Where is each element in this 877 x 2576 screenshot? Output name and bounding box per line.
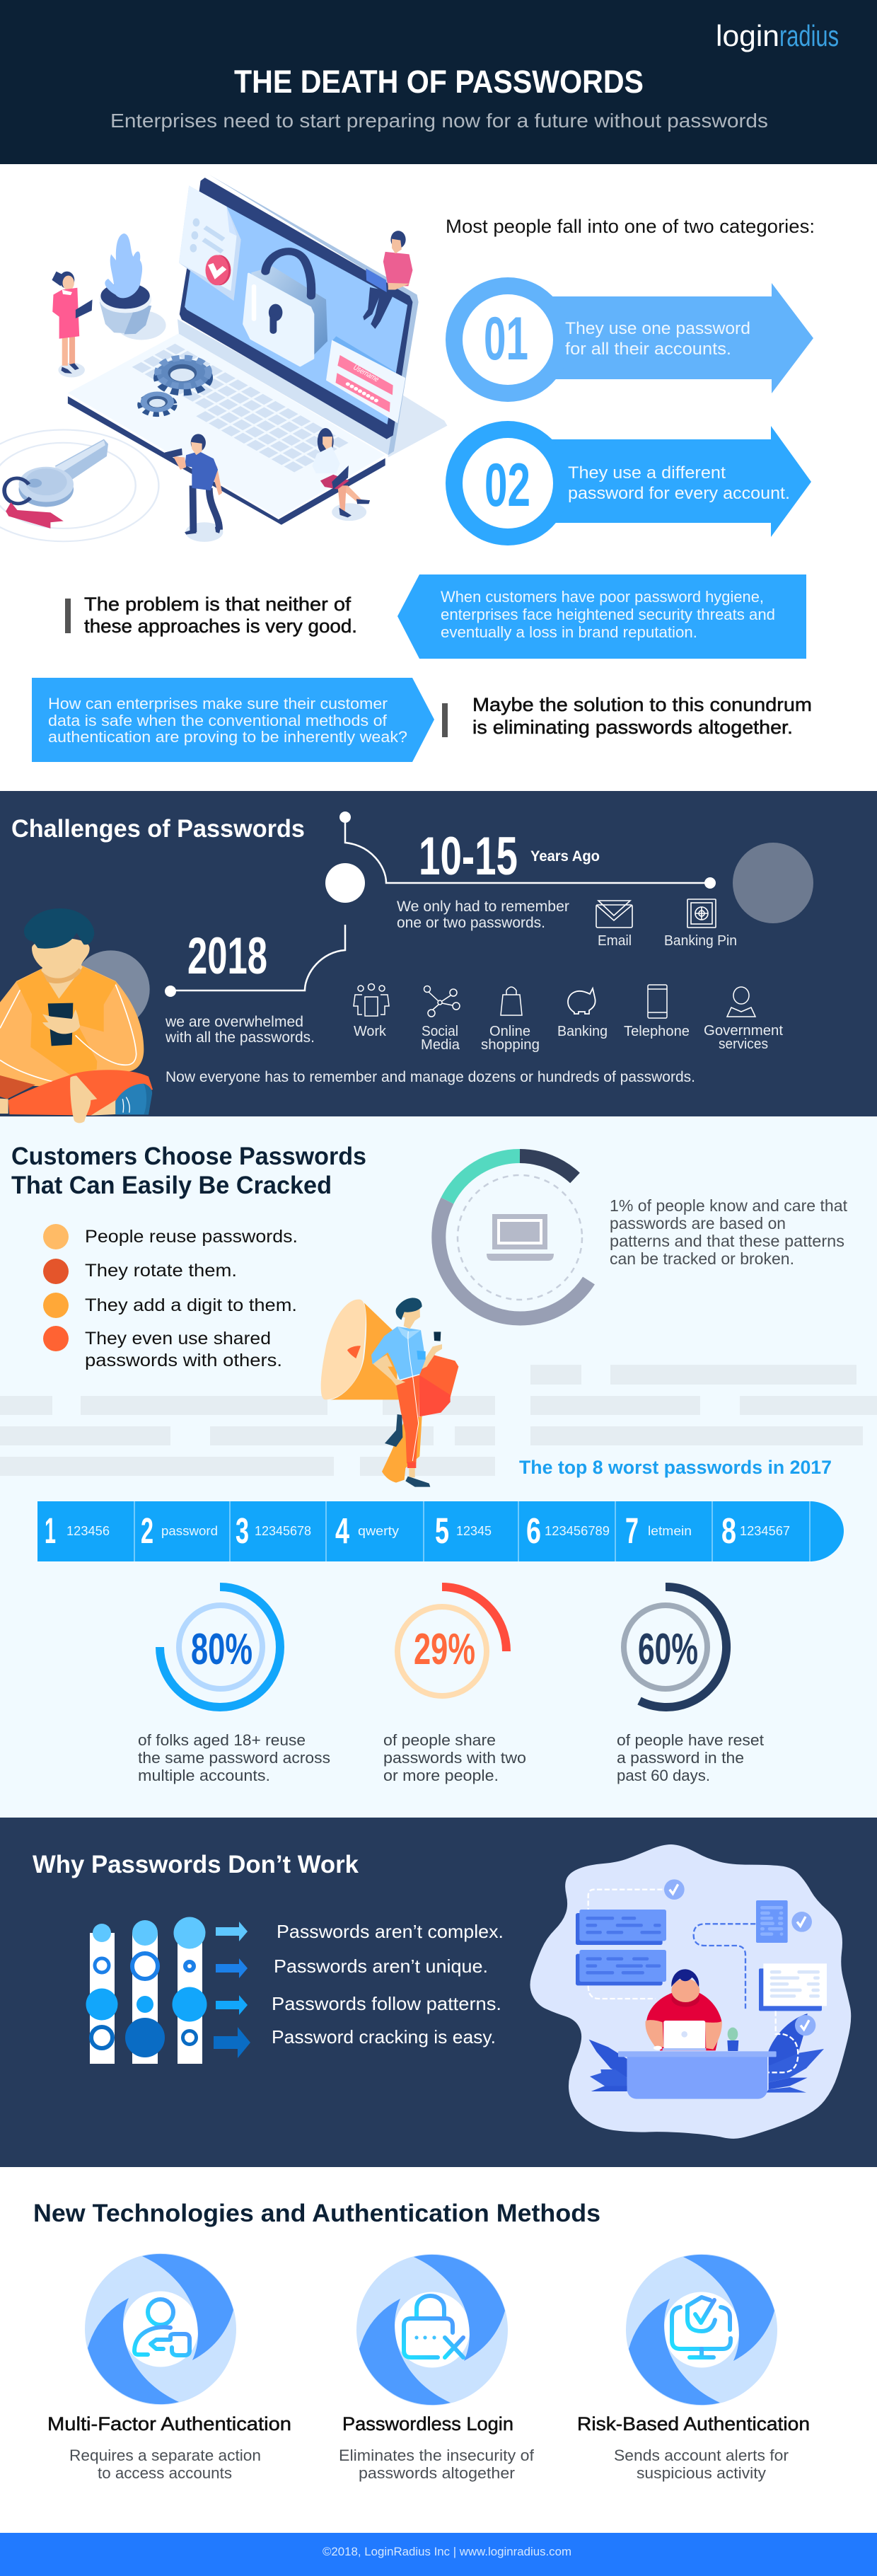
list of reasons: Password cracking is easy. [272, 2026, 496, 2047]
stat text: 29%: or more people. [383, 1767, 499, 1784]
text: everyone: Now everyone has to remember and manage dozens or hundreds of passwords. [165, 1069, 695, 1085]
small plant [727, 2028, 738, 2051]
illustration: person with megaphone [321, 1298, 458, 1487]
description: Requires a separate action [69, 2447, 261, 2464]
keyboard [125, 346, 346, 471]
footer: ©2018, LoginRadius Inc | www.loginradius.com [323, 2545, 571, 2558]
badge with monitor shield icon [626, 2254, 777, 2405]
footer [0, 2533, 877, 2576]
stat ring: 80%: 80% [191, 1625, 252, 1674]
password ranking bar [37, 1501, 844, 1561]
statement: the solution [442, 694, 812, 738]
arrow 1 [216, 1922, 248, 1941]
category 01 arrow [446, 277, 813, 402]
label: online shopping: Online [489, 1024, 530, 1039]
callout: password hygiene [397, 574, 806, 659]
callout: password hygiene: eventually a loss in brand reputation. [441, 623, 697, 641]
label: 2018: 2018 [187, 928, 267, 985]
subtitle: Enterprises need to start preparing now for a future without passwords [110, 110, 768, 132]
panel: person illustration over challenges section [0, 908, 153, 1123]
password names: 12345678 [255, 1524, 311, 1538]
label: Multi-Factor Authentication [47, 2413, 291, 2435]
bullet list: They rotate them. [85, 1261, 237, 1281]
padlock [244, 251, 327, 366]
leaves [589, 2014, 824, 2093]
heading: new technologies: New Technologies and Authentication Methods [33, 2200, 600, 2227]
list of reasons: Passwords aren’t complex. [277, 1921, 504, 1942]
arrow 2 [216, 1958, 248, 1978]
badge with user key icon [85, 2253, 236, 2405]
label: online shopping [481, 1024, 540, 1053]
rank numbers: 1 [45, 1511, 56, 1551]
columns of dots [86, 1917, 207, 2064]
dashed connectors [588, 1890, 755, 2009]
bullet list: They add a digit to them. [85, 1295, 297, 1315]
rank numbers: 6 [526, 1511, 541, 1551]
text: category 02: They use a different [568, 463, 726, 483]
label: email: Email [598, 933, 632, 949]
text: now: we are overwhelmed [165, 1014, 303, 1030]
stat text: 60%: a password in the [617, 1749, 744, 1767]
laptop shadow [387, 385, 447, 458]
icon: piggy bank [568, 988, 596, 1014]
document tablet [756, 1900, 788, 1943]
heading: That Can Easily Be Cracked [11, 1172, 332, 1199]
person: man with flashlight [165, 434, 223, 542]
description: to access accounts [98, 2464, 232, 2482]
list of reasons: Passwords follow patterns. [272, 1993, 501, 2014]
label: Passwordless Login [342, 2413, 513, 2435]
arrow 4 [214, 2027, 250, 2058]
label: banking: Banking [557, 1024, 608, 1039]
right dashed connector [769, 2011, 798, 2072]
stat ring: 60% [624, 1587, 726, 1707]
icon: telephone [648, 985, 667, 1018]
panel: challenges of passwords [0, 791, 877, 1116]
statement: the solution: is eliminating passwords altogether. [472, 717, 793, 738]
text: 1% of people: passwords are based on [610, 1214, 786, 1232]
laptop base [68, 319, 393, 525]
data cards [576, 1910, 666, 1985]
illustration: developer at desk [530, 1845, 850, 2138]
person at laptop [646, 1969, 722, 2050]
icon: online shopping [501, 987, 522, 1015]
stat text: 80%: the same password across [138, 1749, 330, 1767]
description: passwords altogether [359, 2464, 515, 2482]
panel: weak passwords [0, 1116, 877, 1818]
text: category 01 [565, 319, 750, 359]
method: multi-factor authentication [47, 2253, 291, 2482]
password names: 123456 [66, 1524, 110, 1538]
key with rings [0, 429, 158, 541]
login card: Username [352, 364, 381, 383]
label: top 8 worst passwords: The top 8 worst passwords in 2017 [519, 1457, 832, 1478]
callout: customer data: authentication are proving to be inherently weak? [48, 728, 407, 746]
icon: government services [727, 987, 755, 1017]
check badges [664, 1879, 815, 2035]
stat ring: 29% [397, 1587, 506, 1696]
label: work: Work [354, 1024, 387, 1039]
statement: the problem: The problem is that neither of [84, 594, 352, 615]
stat text: 29%: passwords with two [383, 1749, 526, 1767]
rank numbers: 8 [721, 1511, 736, 1551]
text: category 01: for all their accounts. [565, 340, 731, 359]
logo: loginradius [716, 19, 839, 52]
stat text: 60%: past 60 days. [617, 1767, 710, 1784]
callout: customer data [32, 678, 434, 762]
label: government services [704, 1023, 783, 1052]
laptop screen [180, 175, 419, 455]
list of reasons [272, 1921, 504, 2047]
statement: the problem: these approaches is very good. [84, 616, 357, 637]
callout: customer data: data is safe when the conventional methods of [48, 712, 388, 729]
stat text: 29% [383, 1731, 526, 1784]
icon: banking pin safe [687, 899, 716, 928]
text: category 01: They use one password [565, 319, 750, 338]
heading: Challenges of Passwords [11, 815, 305, 843]
password names: qwerty [358, 1524, 399, 1538]
badge with lock icon [356, 2254, 508, 2405]
category 02 arrow [446, 421, 811, 545]
description: Eliminates the insecurity of [339, 2447, 535, 2464]
background bars [0, 1365, 877, 1476]
blob background [530, 1845, 850, 2138]
plant [100, 233, 166, 340]
label: online shopping: shopping [481, 1037, 540, 1053]
description [339, 2447, 535, 2482]
icon: work [354, 983, 389, 1016]
rank numbers: 2 [141, 1511, 153, 1551]
text: now [165, 1014, 315, 1046]
label: 10-15 years ago: Years Ago [530, 848, 600, 865]
stat text: 80%: multiple accounts. [138, 1767, 270, 1784]
label: social media [421, 1024, 460, 1053]
person: man on screen edge [363, 231, 412, 329]
text: 1% of people: patterns and that these patterns [610, 1232, 844, 1250]
label: telephone: Telephone [624, 1024, 690, 1039]
label: government services: services [719, 1036, 768, 1052]
callout: password hygiene: enterprises face heightened security threats and [441, 606, 775, 623]
password names: letmein [648, 1524, 692, 1538]
panel: why passwords don't work [0, 1818, 877, 2167]
text: 1% of people: 1% of people know and care that [610, 1196, 848, 1215]
label: Risk-Based Authentication [577, 2413, 810, 2435]
icon: email [596, 901, 632, 928]
heading: Customers Choose Passwords [11, 1143, 366, 1170]
stat ring: 80% [160, 1587, 280, 1707]
heading [11, 1143, 366, 1199]
rank numbers: 3 [236, 1511, 249, 1551]
grey circle [733, 843, 813, 923]
password names: 12345 [456, 1524, 492, 1538]
text: then: We only had to remember [397, 899, 569, 915]
rank numbers [45, 1511, 736, 1551]
bullet list: They even use shared [85, 1329, 271, 1348]
stat text: 80% [138, 1731, 330, 1784]
bullet list: passwords with others. [85, 1351, 282, 1370]
label: 10-15 years ago: 10-15 [419, 826, 518, 886]
number 02: 02 [484, 451, 530, 519]
timeline [165, 812, 716, 997]
logo: loginradius: radius [779, 19, 839, 52]
text: then: one or two passwords. [397, 915, 545, 931]
list of reasons: Passwords aren’t unique. [274, 1956, 488, 1977]
intro text: Most people fall into one of two categories: [446, 216, 815, 237]
description [614, 2447, 789, 2482]
title: THE DEATH OF PASSWORDS [234, 64, 644, 100]
text: now: with all the passwords. [165, 1029, 315, 1046]
stat text: 29%: of people share [383, 1731, 496, 1749]
heading: Why Passwords Don’t Work [33, 1851, 359, 1878]
header band [0, 0, 877, 164]
password names: 123456789 [545, 1524, 610, 1538]
stat ring: 60%: 60% [638, 1625, 698, 1674]
login card [326, 336, 405, 423]
password names [66, 1524, 790, 1538]
label: government services: Government [704, 1023, 783, 1039]
bullet list: People reuse passwords. [85, 1227, 298, 1247]
icon: social media [424, 986, 460, 1017]
arrow 3 [216, 1995, 248, 2015]
stat ring: 29%: 29% [414, 1625, 475, 1674]
password names: password [161, 1524, 218, 1538]
text: category 02: password for every account. [568, 484, 790, 503]
method: passwordless login [339, 2254, 535, 2482]
desk [618, 2051, 777, 2099]
illustration: laptop with padlock and people [0, 175, 447, 542]
stat text: 60% [617, 1731, 764, 1784]
callout: customer data: How can enterprises make sure their customer [48, 695, 388, 712]
rank numbers: 5 [435, 1511, 449, 1551]
document with badge [179, 185, 241, 301]
description: Sends account alerts for [614, 2447, 789, 2464]
statement: the solution: Maybe the solution to this conundrum [472, 694, 812, 715]
gears [141, 358, 210, 414]
person: woman with laptop [312, 428, 370, 521]
text: category 02 [568, 463, 790, 503]
stat text: 80%: of folks aged 18+ reuse [138, 1731, 306, 1749]
method: risk-based authentication [577, 2254, 810, 2482]
label: social media: Media [421, 1037, 460, 1053]
person: woman with tablet [52, 272, 93, 377]
donut chart with laptop [438, 1156, 588, 1319]
stat text: 60%: of people have reset [617, 1731, 764, 1749]
text: then [397, 899, 569, 931]
text: 1% of people: can be tracked or broken. [610, 1249, 794, 1268]
label: social media: Social [422, 1024, 458, 1039]
label: banking pin: Banking Pin [664, 933, 737, 949]
white card [759, 1963, 827, 2011]
description: suspicious activity [637, 2464, 766, 2482]
description [69, 2447, 261, 2482]
statement: the problem [65, 594, 357, 637]
callout: password hygiene: When customers have poor password hygiene, [441, 588, 764, 606]
bullet list [43, 1224, 298, 1370]
logo: loginradius: login [716, 19, 779, 52]
password names: 1234567 [740, 1524, 790, 1538]
text: 1% of people [610, 1196, 848, 1268]
number 01: 01 [484, 305, 528, 373]
rank numbers: 4 [335, 1511, 349, 1551]
rank numbers: 7 [625, 1511, 639, 1551]
